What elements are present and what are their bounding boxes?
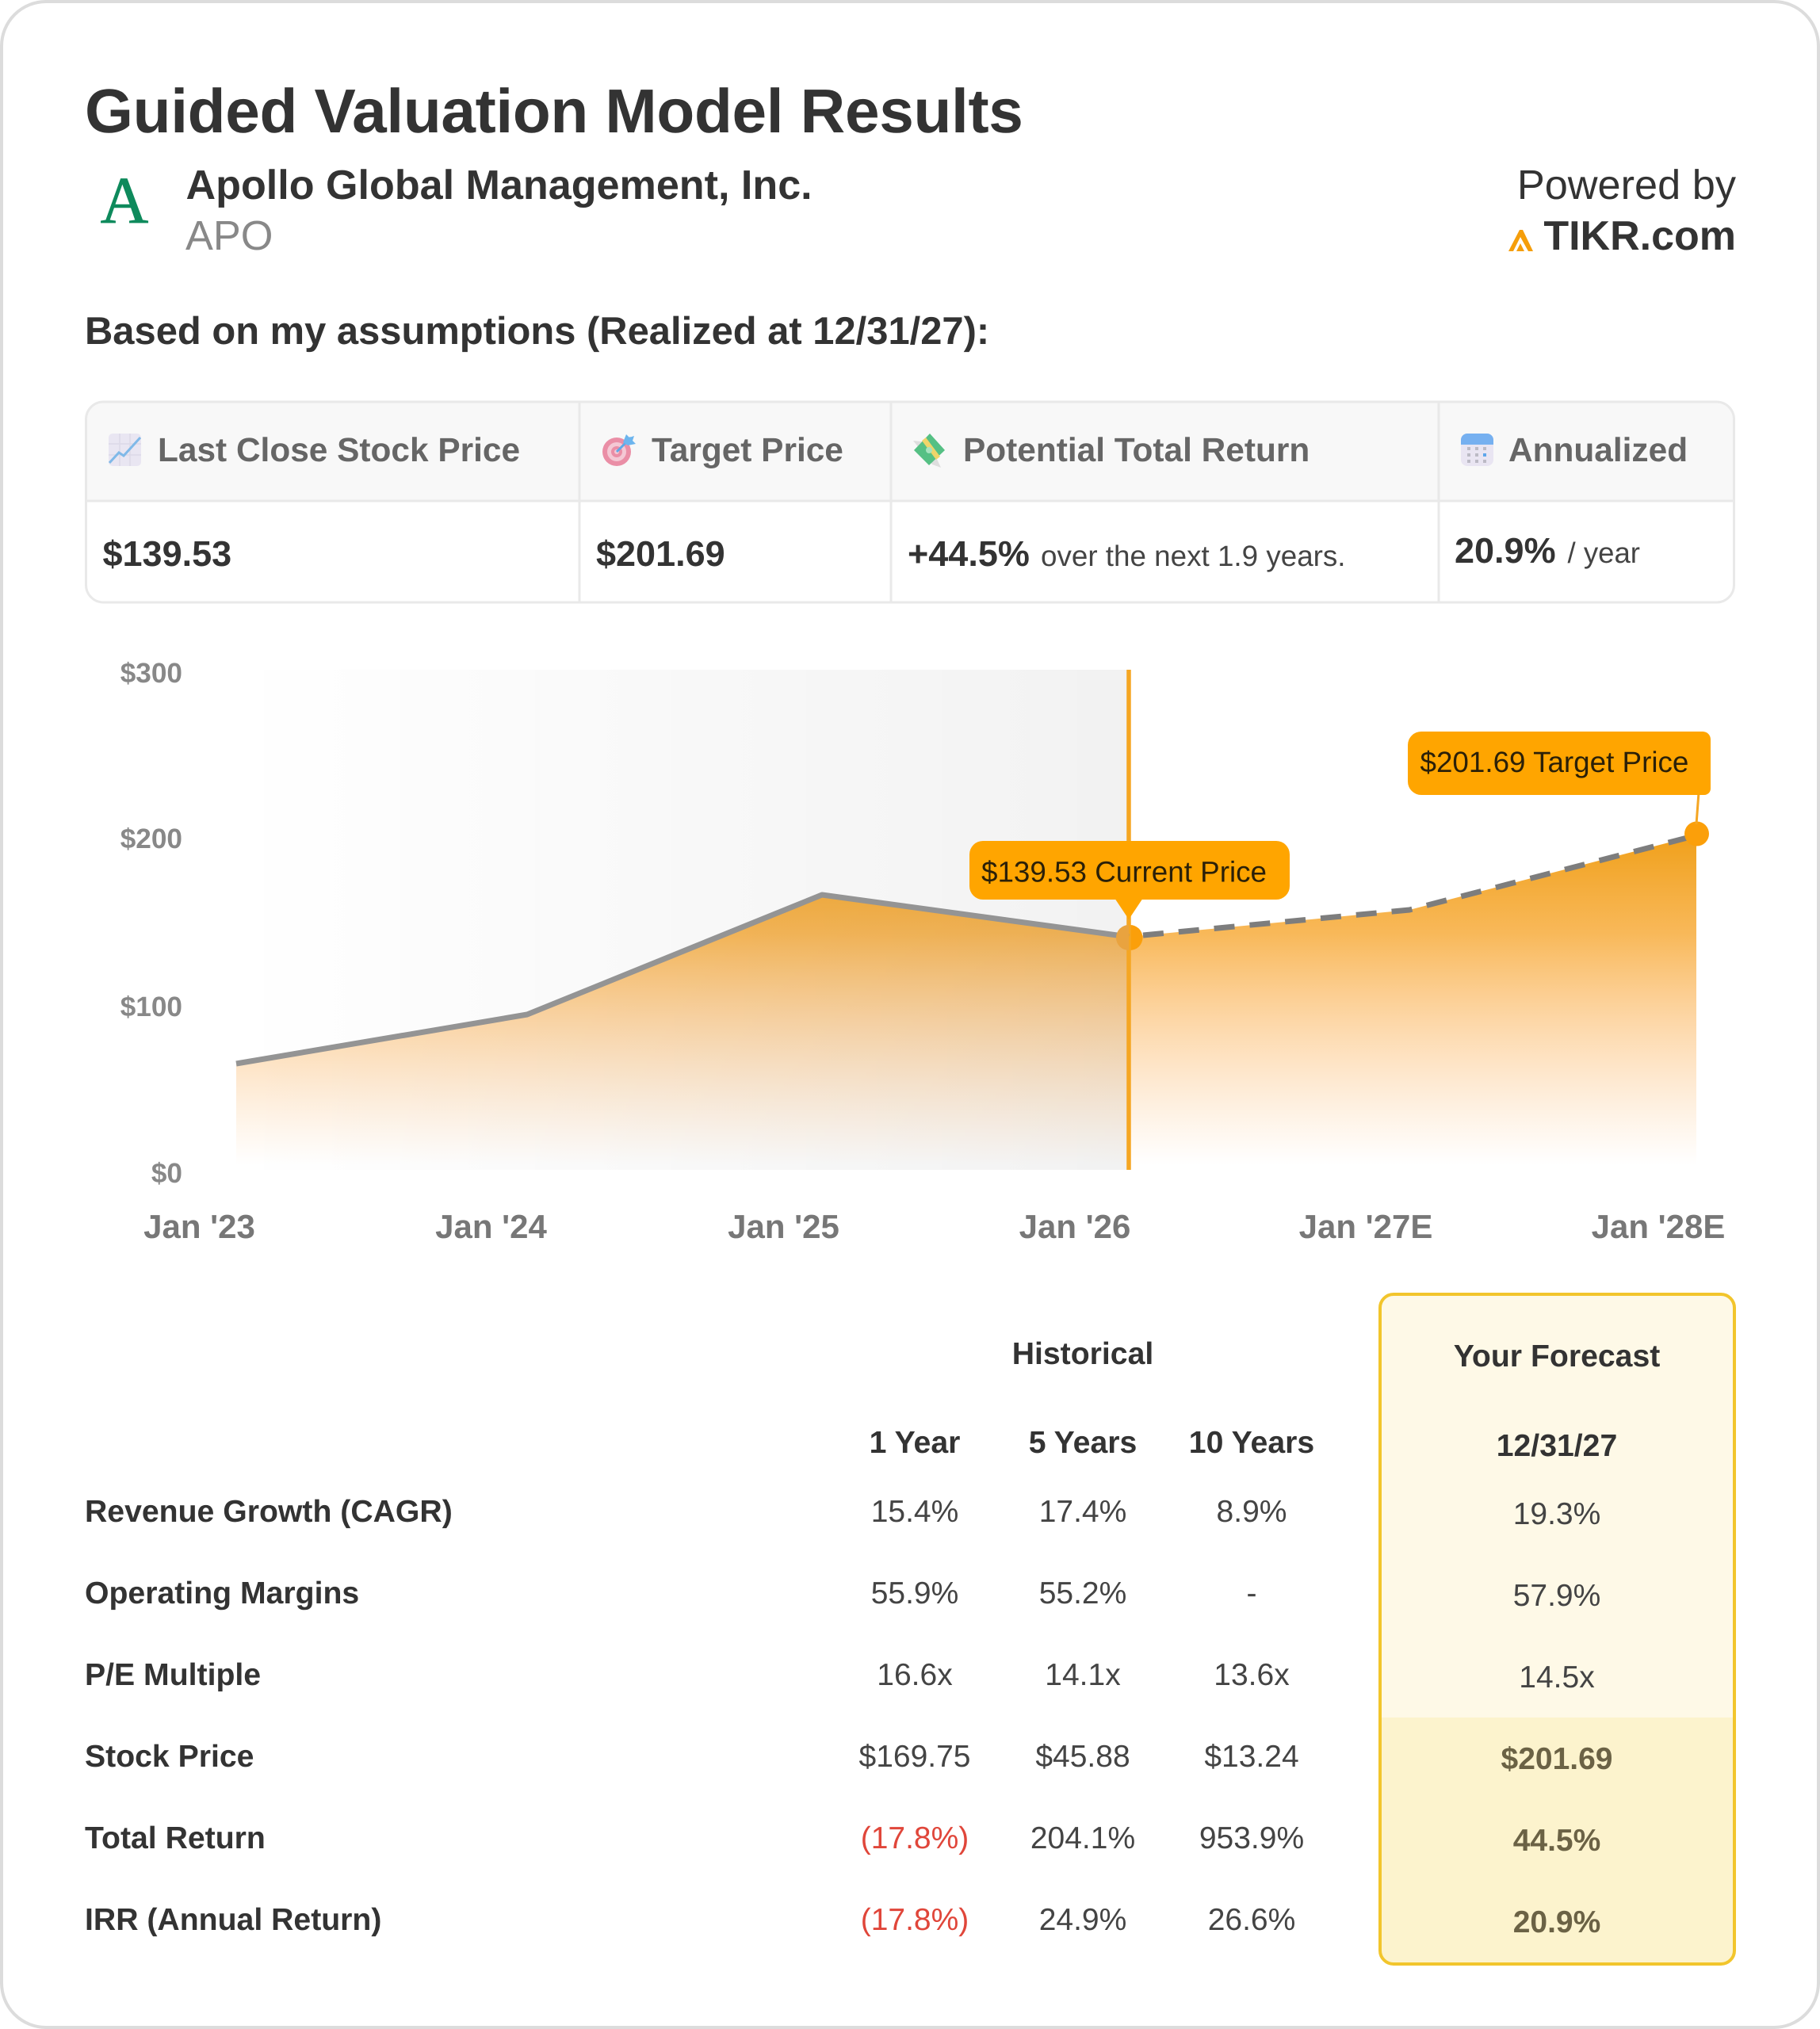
row: P/E multiple: 13.6x	[1214, 1658, 1290, 1692]
row: stock price: $169.75	[859, 1740, 970, 1774]
returns comparison table	[85, 1337, 1660, 1939]
header text: Annualized	[1508, 431, 1688, 468]
company name: Apollo Global Management, Inc.	[185, 162, 812, 208]
row: revenue growth: 15.4%	[871, 1495, 958, 1529]
summary table	[86, 402, 1734, 602]
row: stock price: $201.69	[1501, 1742, 1612, 1776]
row: IRR: IRR (Annual Return)	[85, 1903, 381, 1937]
row: IRR: 24.9%	[1039, 1903, 1126, 1937]
column headings: 5 Years	[1029, 1426, 1137, 1460]
column: potential total return	[908, 431, 1346, 574]
row: total return	[85, 1821, 1600, 1858]
subheading: Based on my assumptions (Realized at 12/31/27):	[85, 310, 989, 353]
powered by TIKR	[1508, 162, 1737, 259]
column: target price	[596, 431, 843, 574]
row: stock price: Stock Price	[85, 1740, 254, 1774]
company header	[101, 162, 812, 259]
header text: Potential Total Return	[963, 431, 1310, 468]
row: operating margins: 55.9%	[871, 1576, 958, 1611]
x axis labels	[143, 1208, 1725, 1245]
x axis labels: Jan '25	[728, 1208, 839, 1245]
icon: TIKR logo	[1508, 230, 1533, 251]
current price marker overlay	[1116, 925, 1129, 950]
row: revenue growth: 8.9%	[1217, 1495, 1287, 1529]
historical price line	[236, 895, 1129, 1064]
row: total return: 953.9%	[1199, 1821, 1304, 1855]
title: Guided Valuation Model Results	[85, 76, 1023, 146]
row: P/E multiple: 14.5x	[1519, 1660, 1595, 1695]
ticker: APO	[185, 213, 273, 259]
target price callout	[1408, 732, 1711, 824]
forecast dashed line	[1143, 835, 1696, 935]
row: total return: 204.1%	[1030, 1821, 1135, 1855]
x axis labels: Jan '26	[1019, 1208, 1130, 1245]
current price marker	[1118, 925, 1143, 950]
value note: / year	[1568, 537, 1640, 569]
current price callout	[969, 841, 1290, 919]
row: operating margins: Operating Margins	[85, 1576, 359, 1611]
x axis labels: Jan '28E	[1592, 1208, 1725, 1245]
forecast panel background	[1380, 1294, 1734, 1964]
row: stock price: $13.24	[1204, 1740, 1299, 1774]
y axis labels: $0	[151, 1158, 182, 1189]
table frame and header band	[86, 402, 1734, 602]
x axis labels: Jan '24	[435, 1208, 548, 1245]
column headings: 10 Years	[1189, 1426, 1314, 1460]
column headings: 12/31/27	[1497, 1429, 1617, 1463]
target price marker	[1684, 821, 1709, 846]
historical heading: Historical	[1012, 1337, 1153, 1371]
row: IRR: (17.8%)	[861, 1903, 969, 1937]
value: $139.53	[103, 533, 231, 574]
x axis labels: Jan '23	[143, 1208, 255, 1245]
y axis labels: $100	[120, 992, 182, 1022]
y axis labels: $200	[120, 823, 182, 854]
icon: money with wings	[913, 434, 945, 468]
row: revenue growth: 19.3%	[1513, 1497, 1600, 1531]
row: IRR: 20.9%	[1513, 1905, 1600, 1939]
icon: calendar	[1461, 434, 1493, 466]
area fill	[236, 835, 1696, 1170]
column headings	[870, 1426, 1617, 1463]
row: operating margins: 55.2%	[1039, 1576, 1126, 1611]
current price vertical line	[1126, 670, 1131, 1170]
row: total return: Total Return	[85, 1821, 266, 1855]
x axis labels: Jan '27E	[1299, 1208, 1432, 1245]
column headings: 1 Year	[870, 1426, 960, 1460]
y axis labels: $300	[120, 658, 182, 689]
row: stock price	[85, 1740, 1612, 1776]
icon: target	[602, 434, 636, 466]
row: total return: 44.5%	[1513, 1824, 1600, 1858]
target price callout: $201.69 Target Price	[1420, 746, 1688, 778]
row: P/E multiple: 16.6x	[877, 1658, 953, 1692]
row: operating margins: 57.9%	[1513, 1579, 1600, 1613]
header text: Last Close Stock Price	[158, 431, 520, 468]
row: operating margins: -	[1246, 1576, 1257, 1611]
value: +44.5%	[908, 533, 1030, 574]
y axis labels	[120, 658, 182, 1189]
powered by label: Powered by	[1517, 162, 1737, 208]
value: 20.9%	[1455, 530, 1556, 571]
row: P/E multiple: 14.1x	[1045, 1658, 1121, 1692]
column: annualized	[1455, 431, 1688, 571]
header text: Target Price	[652, 431, 843, 468]
row: stock price: $45.88	[1035, 1740, 1130, 1774]
value: $201.69	[596, 533, 725, 574]
row: revenue growth: 17.4%	[1039, 1495, 1126, 1529]
row: operating margins	[85, 1576, 1600, 1613]
row: revenue growth	[85, 1495, 1600, 1531]
forecast heading: Your Forecast	[1454, 1339, 1660, 1374]
icon: company logo: A	[101, 164, 149, 238]
row: total return: (17.8%)	[861, 1821, 969, 1855]
column: last close	[103, 431, 520, 574]
price chart	[120, 658, 1725, 1245]
TIKR name: TIKR.com	[1543, 213, 1736, 259]
row: revenue growth: Revenue Growth (CAGR)	[85, 1495, 453, 1529]
historical shaded band	[230, 670, 1129, 1170]
row: IRR: 26.6%	[1208, 1903, 1295, 1937]
row: P/E multiple: P/E Multiple	[85, 1658, 261, 1692]
current price callout: $139.53 Current Price	[981, 856, 1267, 888]
value note: over the next 1.9 years.	[1041, 540, 1346, 572]
row: P/E multiple	[85, 1658, 1595, 1695]
row: IRR	[85, 1903, 1600, 1939]
icon: chart increasing	[109, 434, 141, 466]
